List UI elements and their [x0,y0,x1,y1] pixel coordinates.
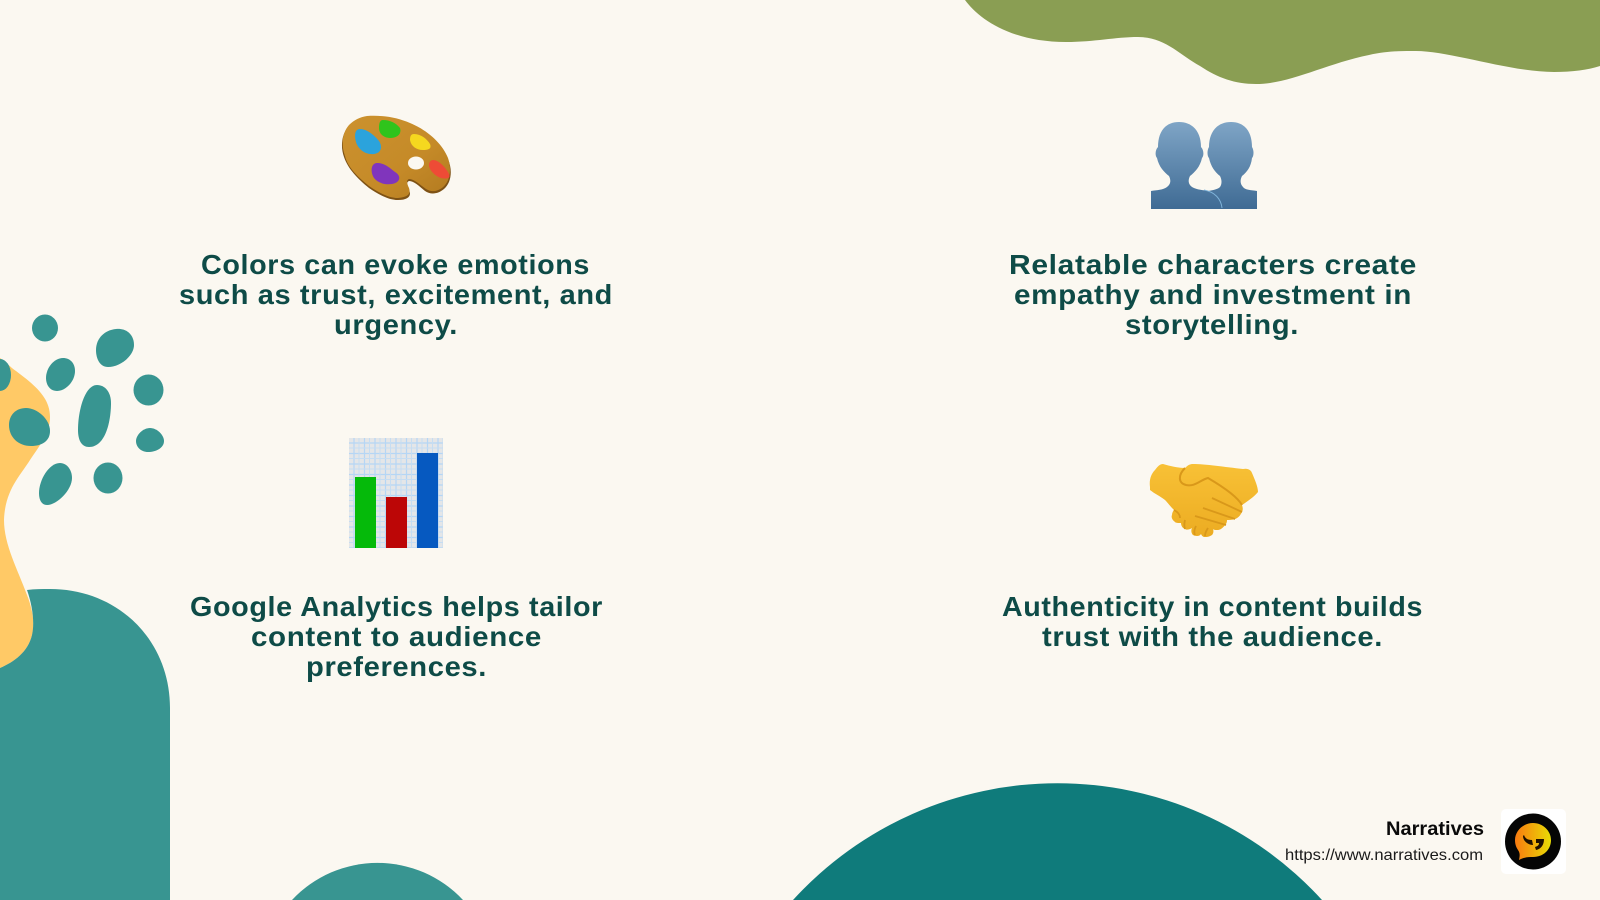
text: characters: storytelling. [1125,309,1299,340]
paint: red [429,160,449,179]
text: analytics [190,591,603,682]
text: colors [179,249,613,340]
text: characters [1009,249,1417,340]
paint: purple [372,163,399,184]
icon: busts in silhouette [1151,122,1257,209]
icon: handshake [1150,464,1258,537]
bar: green [355,477,376,548]
shape: left yellow blob [0,358,50,668]
shape: left teal arch [0,589,170,900]
brand logo [1501,809,1566,874]
text: authenticity [1002,591,1423,652]
text: authenticity: trust with the audience. [1042,621,1383,652]
shape: top green wave [965,0,1600,84]
brand url: https://www.narratives.com [1285,847,1483,864]
text: characters: Relatable characters create [1009,249,1417,280]
decoration: teal dots [0,314,164,505]
text: authenticity: Authenticity in content builds [1002,591,1423,622]
text: analytics: preferences. [306,651,487,682]
shape: small bottom teal circle [292,863,463,900]
bar: blue [417,453,438,548]
text: characters: empathy and investment in [1014,279,1412,310]
icon: bar chart [349,438,443,548]
paint: blue [355,129,381,154]
paint: yellow [410,134,431,150]
text: analytics: content to audience [251,621,542,652]
text: analytics: Google Analytics helps tailor [190,591,603,622]
paint: green [379,120,400,138]
shape: large bottom teal circle [793,783,1322,900]
palette hole [408,156,424,170]
text: colors: Colors can evoke emotions [201,249,590,280]
bar: red [386,497,407,548]
text: colors: such as trust, excitement, and [179,279,613,310]
icon: artist palette [342,116,451,200]
text: colors: urgency. [334,309,458,340]
brand name: Narratives [1386,818,1484,840]
